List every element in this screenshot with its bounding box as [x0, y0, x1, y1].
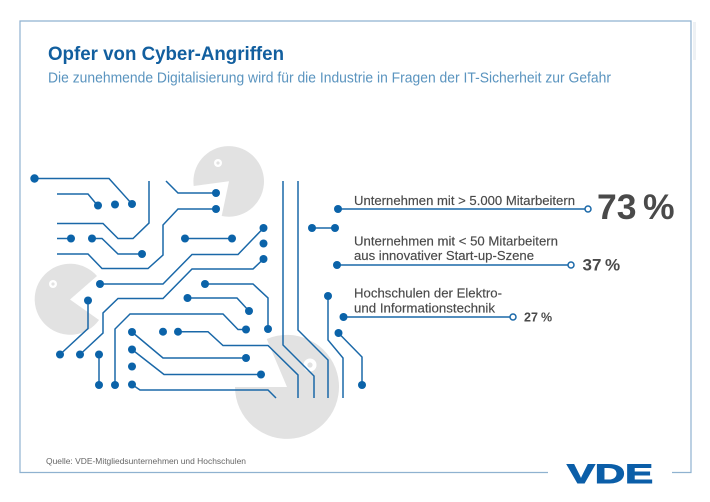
data row: universities: Hochschulen der Elektro- [354, 286, 502, 300]
data row: universities: und Informationstechnik [354, 302, 496, 316]
data row: large companies: 73 [597, 187, 636, 227]
data row: universities: 27 [524, 310, 538, 324]
data row: start-ups [333, 235, 620, 274]
data row: start-ups: % [605, 256, 620, 274]
title: Opfer von Cyber-Angriffen [48, 43, 284, 65]
data row: large companies: % [643, 187, 675, 227]
data row: start-ups: aus innovativer Start-up-Szene [354, 249, 534, 263]
circuit traces [34, 178, 362, 398]
VDE logo: VDE [567, 459, 653, 489]
data row: large companies [334, 187, 675, 227]
pacman: left [35, 264, 99, 335]
subtitle: Die zunehmende Digitalisierung wird für die Industrie in Fragen der IT-Sicherheit zur Gefahr [48, 70, 611, 86]
data row: start-ups: Unternehmen mit < 50 Mitarbeitern [354, 235, 558, 249]
data row: start-ups: 37 [582, 256, 601, 274]
data row: universities [340, 286, 552, 324]
data row: large companies: Unternehmen mit > 5.000 Mitarbeitern [354, 194, 575, 208]
circuit nodes [30, 174, 366, 389]
pacman: top [193, 146, 264, 217]
circuit illustration [30, 146, 366, 439]
pacman: bottom [235, 335, 339, 439]
source note: Quelle: VDE-Mitgliedsunternehmen und Hochschulen [46, 456, 246, 466]
margin imprint [693, 22, 696, 60]
data row: universities: % [541, 310, 552, 324]
